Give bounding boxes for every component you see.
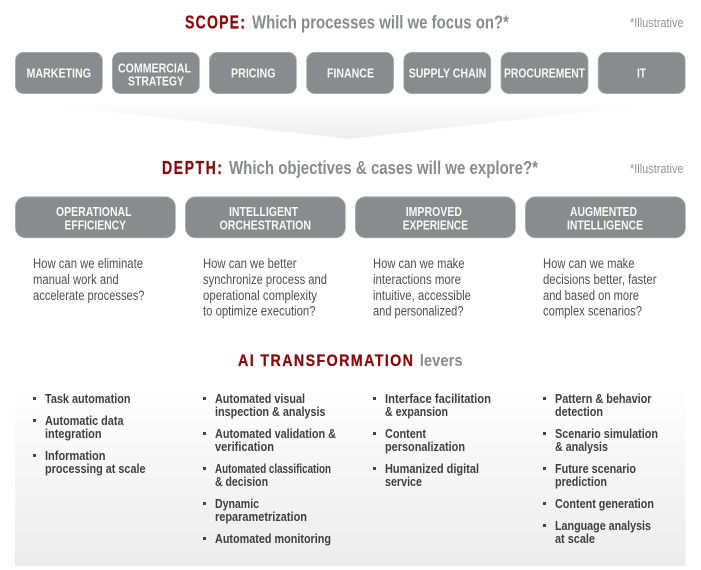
list: augmented intelligence levers: at scale xyxy=(555,531,595,546)
box: marketing xyxy=(15,52,102,94)
list: improved experience levers xyxy=(373,391,491,489)
funnel arrow xyxy=(15,101,685,139)
list: augmented intelligence levers: Content generation xyxy=(555,496,654,511)
box: commercial strategy: COMMERCIAL xyxy=(118,61,191,76)
heading: depth: DEPTH: xyxy=(162,158,222,179)
list: operational efficiency levers: Information xyxy=(45,448,106,463)
list: improved experience levers: Humanized digital xyxy=(385,461,479,476)
box: pricing: PRICING xyxy=(231,65,276,80)
list: augmented intelligence levers: & analysis xyxy=(555,439,608,454)
question text: How can we eliminate xyxy=(33,256,143,271)
list: augmented intelligence levers: prediction xyxy=(555,474,607,489)
question text: and personalized? xyxy=(373,304,464,318)
box: improved experience xyxy=(355,197,515,238)
box: augmented intelligence: INTELLIGENCE xyxy=(567,217,643,232)
box: it xyxy=(598,52,685,94)
list: intelligent orchestration levers: inspection & analysis xyxy=(215,404,326,419)
heading: depth xyxy=(162,157,539,179)
list: augmented intelligence levers: Pattern & behavior xyxy=(555,391,652,406)
heading: scope: SCOPE: xyxy=(185,13,245,33)
box: finance: FINANCE xyxy=(327,65,374,80)
column: augmented intelligence xyxy=(525,197,685,318)
box: augmented intelligence: AUGMENTED xyxy=(570,204,637,219)
heading: scope xyxy=(185,12,510,33)
question text: decisions better, faster xyxy=(543,272,657,287)
box: intelligent orchestration: INTELLIGENT xyxy=(229,204,298,219)
question text: interactions more xyxy=(373,272,461,287)
box: commercial strategy xyxy=(112,52,199,94)
question text xyxy=(543,256,657,318)
list: improved experience levers: service xyxy=(385,474,422,489)
list: intelligent orchestration levers: Dynamic xyxy=(215,496,259,511)
heading: ai transformation levers: AI TRANSFORMATION xyxy=(238,352,413,370)
list: operational efficiency levers: processing at scale xyxy=(45,461,146,476)
list: improved experience levers: & expansion xyxy=(385,404,448,419)
box: augmented intelligence xyxy=(525,197,685,238)
box: procurement xyxy=(501,52,588,94)
box: pricing xyxy=(209,52,296,94)
list: intelligent orchestration levers: Automated visual xyxy=(215,391,305,406)
heading: depth: Which objectives & cases will we explore?* xyxy=(229,157,539,178)
question text xyxy=(33,256,144,303)
box: improved experience: EXPERIENCE xyxy=(403,217,468,232)
column: improved experience xyxy=(355,197,515,318)
question text: intuitive, accessible xyxy=(373,288,471,303)
box: intelligent orchestration: ORCHESTRATION xyxy=(220,217,311,232)
box: improved experience: IMPROVED xyxy=(406,204,462,219)
question text: manual work and xyxy=(33,272,119,287)
question text xyxy=(203,256,327,318)
box: operational efficiency: OPERATIONAL xyxy=(56,204,132,219)
box: operational efficiency xyxy=(15,197,175,238)
box: supply chain xyxy=(404,52,491,94)
box: it: IT xyxy=(637,65,646,80)
list: operational efficiency levers: Task automation xyxy=(45,391,131,406)
list: augmented intelligence levers: Future scenario xyxy=(555,461,636,476)
question text: How can we make xyxy=(543,256,634,271)
note: illustrative depth: *Illustrative xyxy=(630,161,684,176)
list: improved experience levers: Content xyxy=(385,426,427,441)
box: intelligent orchestration xyxy=(185,197,345,238)
box: finance xyxy=(307,52,394,94)
list: augmented intelligence levers: Language analysis xyxy=(555,518,651,533)
note: illustrative scope: *Illustrative xyxy=(630,15,684,30)
list: augmented intelligence levers: detection xyxy=(555,404,603,419)
box: procurement: PROCUREMENT xyxy=(504,65,585,80)
question text: operational complexity xyxy=(203,288,317,303)
process boxes row xyxy=(15,52,685,94)
list: operational efficiency levers xyxy=(33,391,146,476)
box: commercial strategy: STRATEGY xyxy=(128,74,184,88)
list: improved experience levers: personalization xyxy=(385,439,465,454)
question text: to optimize execution? xyxy=(203,304,316,318)
list: augmented intelligence levers: Scenario simulation xyxy=(555,426,658,441)
list: augmented intelligence levers xyxy=(543,391,658,546)
question text: How can we better xyxy=(203,256,297,271)
box: operational efficiency: EFFICIENCY xyxy=(64,217,126,232)
list: intelligent orchestration levers: Automated validation & xyxy=(215,426,336,441)
list: intelligent orchestration levers xyxy=(203,391,336,546)
list: improved experience levers: Interface facilitation xyxy=(385,391,491,406)
box: marketing: MARKETING xyxy=(26,65,91,80)
question text: synchronize process and xyxy=(203,272,327,287)
heading: ai transformation levers: levers xyxy=(420,351,463,370)
list: intelligent orchestration levers: Automated monitoring xyxy=(215,531,331,546)
panel: levers background xyxy=(15,385,686,566)
list: intelligent orchestration levers: verification xyxy=(215,439,274,454)
list: operational efficiency levers: Automatic data xyxy=(45,413,124,428)
question text: complex scenarios? xyxy=(543,304,642,318)
list: operational efficiency levers: integration xyxy=(45,426,102,441)
question text: accelerate processes? xyxy=(33,288,144,303)
box: supply chain: SUPPLY CHAIN xyxy=(409,65,486,80)
question text: and based on more xyxy=(543,288,639,303)
column: operational efficiency xyxy=(15,197,175,303)
question text xyxy=(373,256,471,318)
list: intelligent orchestration levers: & decision xyxy=(215,474,268,489)
column: intelligent orchestration xyxy=(185,197,345,318)
list: intelligent orchestration levers: reparametrization xyxy=(215,509,307,524)
heading: scope: Which processes will we focus on?* xyxy=(252,12,510,32)
list: intelligent orchestration levers: Automated classification xyxy=(215,461,331,476)
question text: How can we make xyxy=(373,256,464,271)
